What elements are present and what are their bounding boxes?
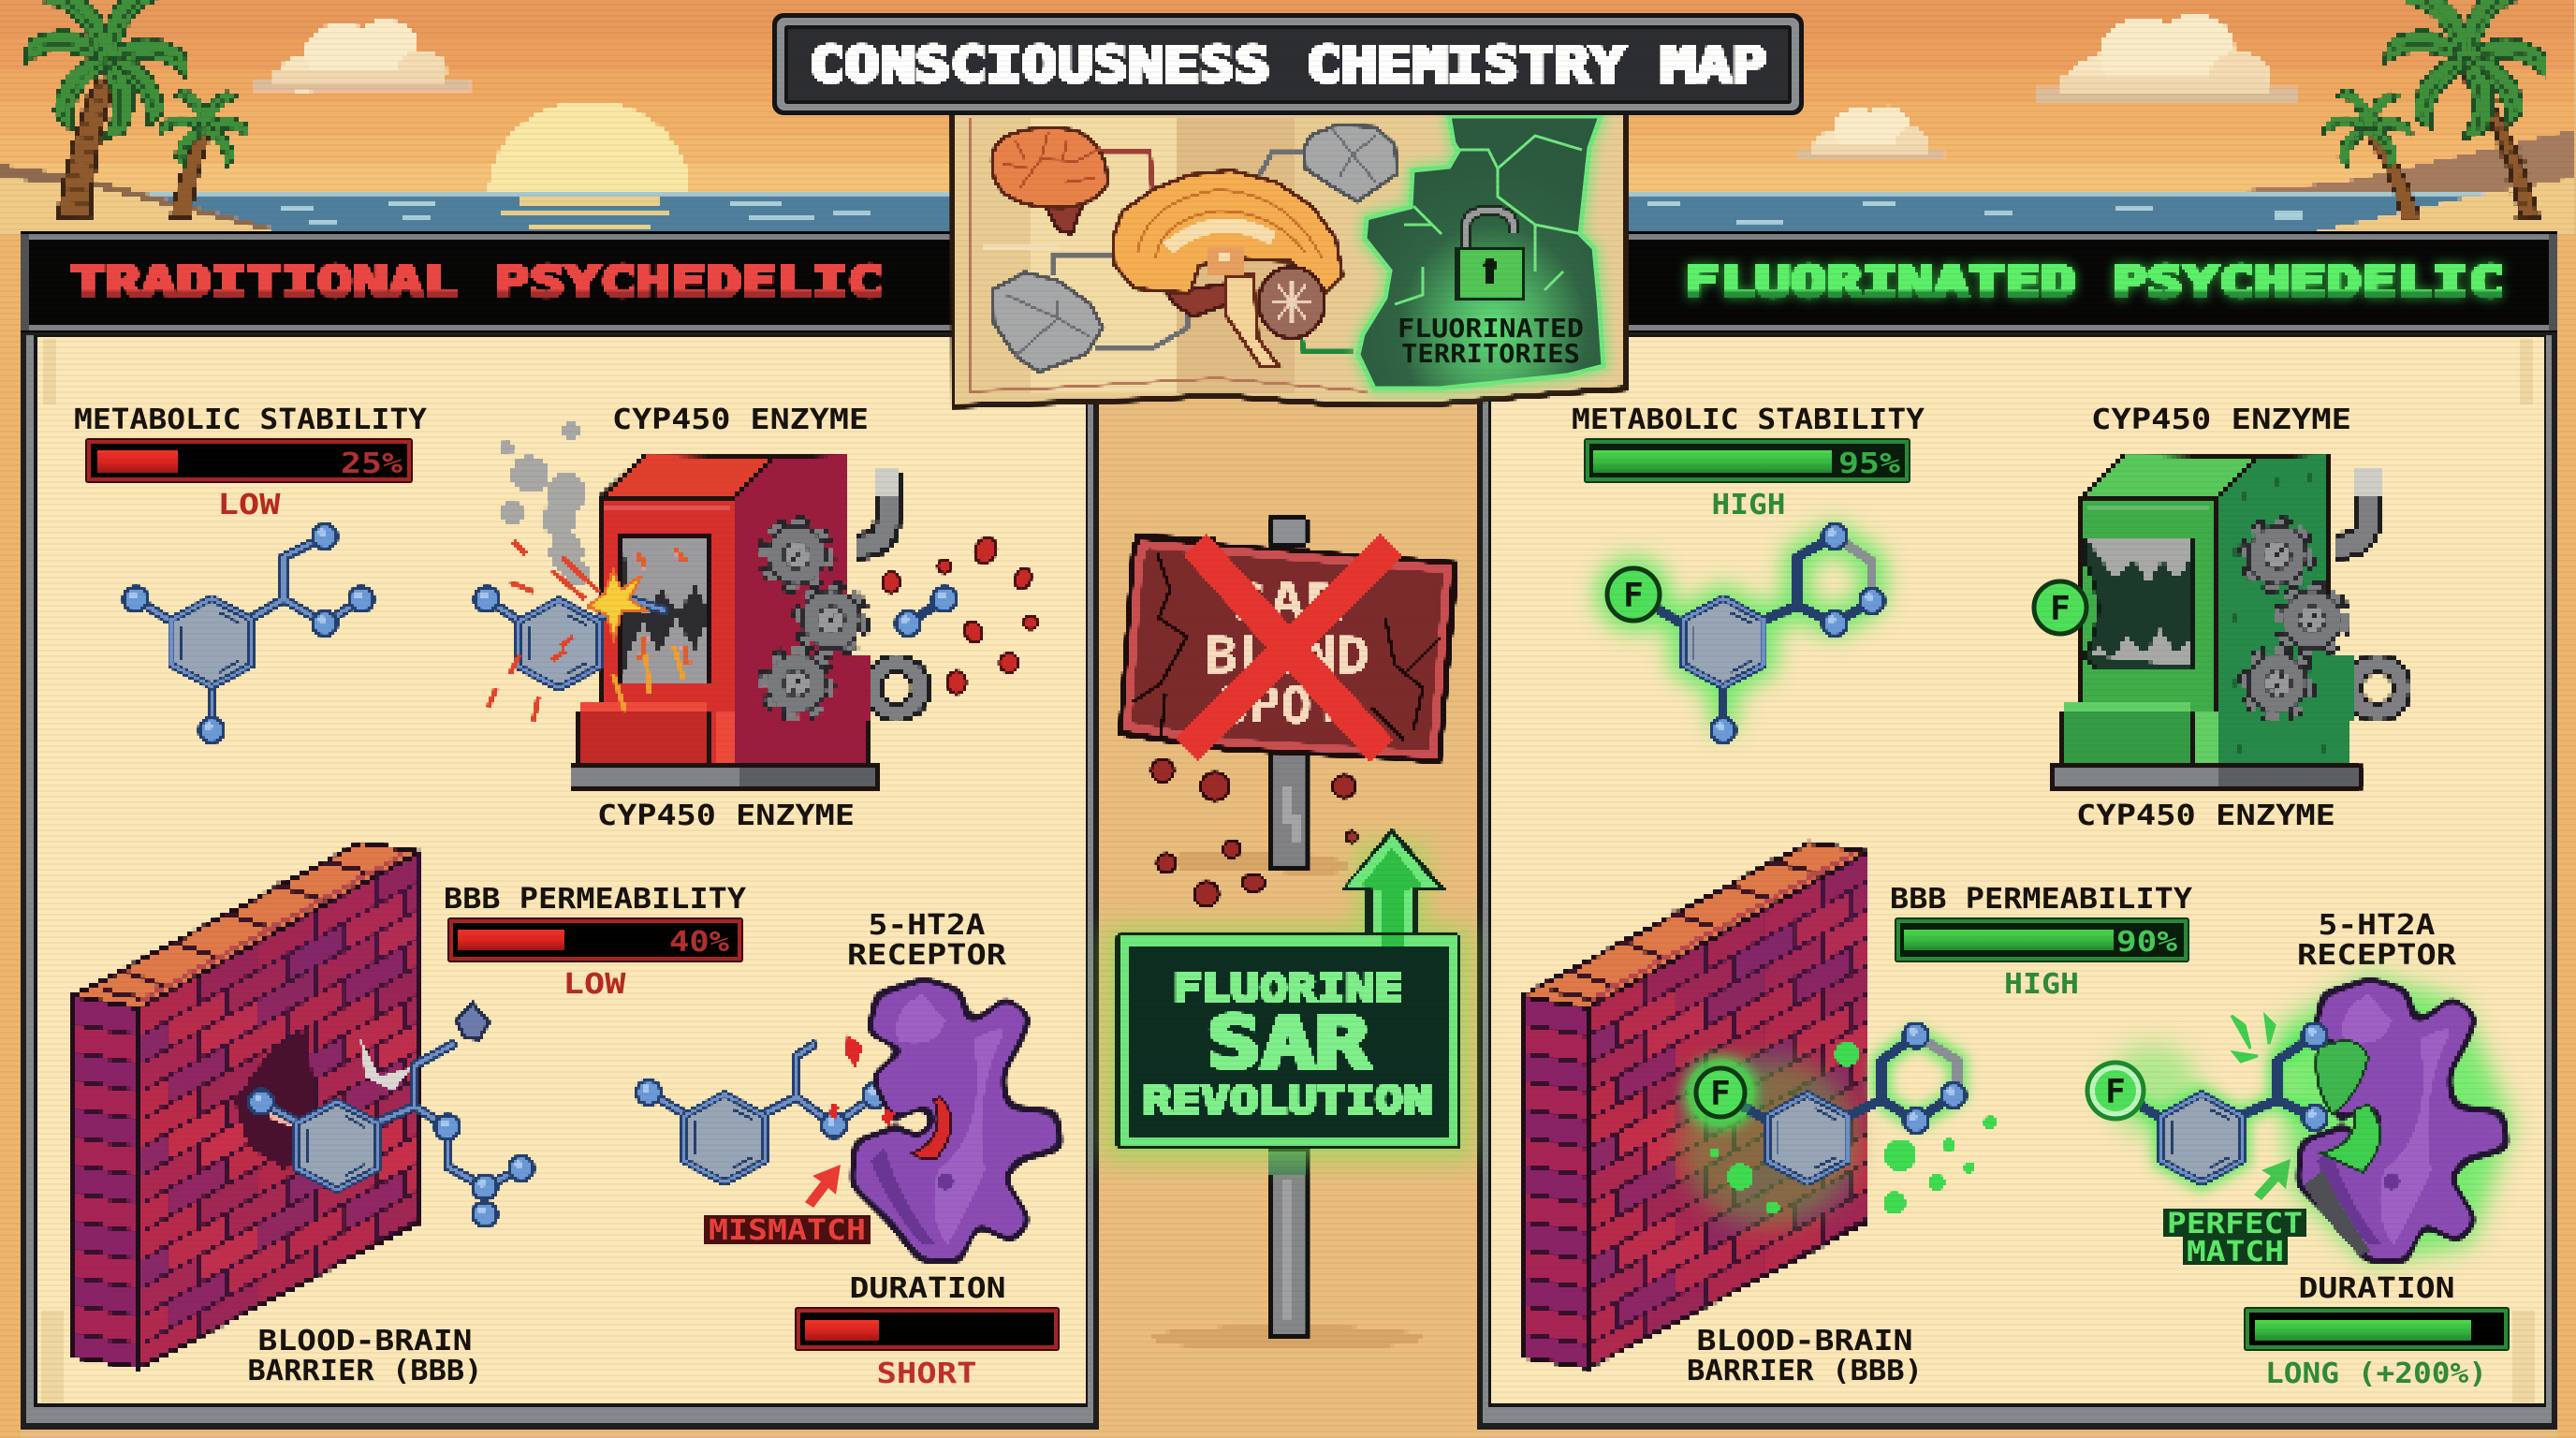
smoke cloud: [501, 422, 590, 586]
label: BBB permeability: BBB PERMEABILITY: [1890, 883, 2192, 916]
progress bar: BBB permeability 40%: [447, 917, 743, 962]
palm tree large left: [24, 0, 187, 217]
molecule crushed in machine: [475, 587, 665, 688]
icon: large brain cross-section: [1113, 170, 1342, 366]
sign board: [1116, 933, 1461, 1150]
label: CYP450 enzyme top: CYP450 ENZYME: [2091, 404, 2351, 436]
molecule glow: [2115, 1035, 2315, 1182]
arrow: perfect match: [2254, 1159, 2291, 1200]
label: duration: DURATION: [850, 1272, 1005, 1305]
label: fluorinated territories: FLUORINATED: [1398, 313, 1584, 344]
progress bar: BBB permeability 40%: 40%: [669, 926, 729, 959]
molecule glow: [1692, 1035, 1957, 1121]
machine: green CYP450 enzyme: [2052, 454, 2402, 787]
label: long plus 200 percent: LONG (+200%): [2265, 1357, 2487, 1390]
header bar right: [1620, 231, 2557, 332]
label: short: SHORT: [876, 1357, 977, 1390]
clouds: [253, 14, 2298, 159]
palm tree large right: [2384, 0, 2547, 217]
label: low permeability: LOW: [564, 968, 627, 1001]
label: CYP450 enzyme bottom: CYP450 ENZYME: [597, 800, 855, 832]
sea: [0, 191, 2576, 234]
sign text: fluorine: FLUORINE: [1173, 966, 1403, 1011]
red cross: [1187, 545, 1391, 751]
title text: CONSCIOUSNESS CHEMISTRY MAP: [809, 37, 1767, 94]
rubble drops: [1151, 759, 1357, 906]
sign text: SAR: SAR: [1207, 1001, 1369, 1084]
panel: traditional psychedelic: [21, 231, 1099, 1430]
molecule glow: [1609, 536, 1872, 730]
sign: fluorine SAR revolution: [1116, 828, 1461, 1150]
post lower: [1270, 1150, 1306, 1336]
mouth with crushing teeth: [621, 535, 710, 683]
green sparkles: [1710, 1042, 1997, 1214]
label: fluorinated territories: TERRITORIES: [1401, 338, 1580, 369]
label: high stability: HIGH: [1711, 489, 1786, 521]
label: metabolic stability: METABOLIC STABILITY: [74, 404, 427, 436]
molecule: perfect match: [2087, 1023, 2327, 1182]
caption: blood-brain barrier: BARRIER (BBB): [247, 1355, 483, 1387]
fluorine atom badge: [1607, 568, 1660, 621]
header bar left: [21, 231, 959, 332]
post upper: [1270, 516, 1306, 868]
fluorine atom badge: F: [1710, 1075, 1731, 1113]
label: CYP450 enzyme bottom: CYP450 ENZYME: [2076, 800, 2335, 832]
sign text: BLIND: [1205, 626, 1369, 685]
panel: fluorinated psychedelic: [1477, 231, 2557, 1430]
label: 5-HT2A: 5-HT2A: [2318, 909, 2436, 942]
fluorine atom entering enzyme: F: [2050, 590, 2071, 628]
green glow behind sign: [1105, 843, 1471, 1161]
progress bar: duration long: [2244, 1307, 2510, 1351]
panel frame right: [1477, 332, 2557, 1430]
progress bar: metabolic stability 95%: 95%: [1838, 448, 1900, 480]
upward arrow: [1340, 828, 1447, 946]
molecule: traditional: [124, 524, 373, 742]
panel frame left: [21, 332, 1099, 1430]
label: receptor: RECEPTOR: [847, 939, 1007, 972]
icon: gray territory left: [992, 272, 1103, 372]
sparks: [2232, 1016, 2275, 1062]
molecule stuck in wall: [249, 1004, 534, 1226]
fluorine atom badge: [2087, 1063, 2144, 1119]
sign: blind spot crossed out: [1118, 534, 1457, 765]
sign text: SPOT: [1217, 676, 1344, 735]
sign text: revolution: REVOLUTION: [1143, 1078, 1432, 1123]
receptor: purple with green fit: [2106, 974, 2513, 1264]
molecule: fluorinated: [1607, 524, 1884, 742]
caption: blood-brain barrier: [247, 1325, 483, 1387]
fluorine atom badge: [1687, 1059, 1754, 1126]
progress bar: metabolic stability 95%: [1584, 438, 1910, 483]
treasure map: consciousness territories: [950, 113, 1628, 409]
callout: perfect match: [2163, 1208, 2306, 1269]
brick wall: blood-brain barrier: [74, 843, 419, 1368]
fluorine atom entering enzyme: [2034, 581, 2086, 634]
label: receptor: RECEPTOR: [2297, 939, 2457, 972]
left beach: [0, 168, 271, 236]
icon: small orange brain: [992, 127, 1107, 234]
receptor: purple with red pocket: [829, 977, 1063, 1264]
label: fluorinated territories: [1398, 313, 1584, 369]
progress bar: duration short: [795, 1307, 1060, 1351]
right hill and beach: [2245, 129, 2576, 236]
caption: blood-brain barrier: BLOOD-BRAIN: [258, 1325, 472, 1357]
open maw with teeth: [2085, 539, 2191, 669]
caption: blood-brain barrier: BARRIER (BBB): [1687, 1355, 1923, 1387]
label: high permeability: HIGH: [2004, 968, 2079, 1001]
dirt patches: [1151, 850, 1423, 1350]
molecule: mismatch: [637, 1045, 887, 1182]
fluorine atom badge: F: [1623, 577, 1644, 615]
center column: signposts: [1105, 516, 1471, 1350]
progress bar: BBB permeability 90%: [1895, 917, 2189, 962]
hole in wall: [234, 1030, 316, 1170]
background: beach sunset scene: [0, 0, 2576, 236]
label: duration: DURATION: [2299, 1272, 2454, 1305]
palm tree small left: [160, 84, 249, 217]
label: low stability: LOW: [217, 489, 282, 521]
progress bar: metabolic stability 25%: [85, 438, 413, 483]
debris and broken fragment: [883, 535, 1037, 694]
label: CYP450 enzyme top: CYP450 ENZYME: [612, 404, 869, 436]
label: metabolic stability: METABOLIC STABILITY: [1572, 404, 1925, 436]
callout: perfect match: MATCH: [2187, 1236, 2284, 1269]
progress bar: BBB permeability 90%: 90%: [2116, 926, 2177, 959]
label: BBB permeability: BBB PERMEABILITY: [444, 883, 746, 916]
fluorine atom badge: F: [2105, 1073, 2126, 1111]
label: 5-HT2A receptor: 5-HT2A: [869, 909, 985, 942]
molecule passing through wall: [1687, 1023, 1997, 1214]
connector lines: [1054, 151, 1354, 352]
caption: blood-brain barrier: BLOOD-BRAIN: [1696, 1325, 1913, 1357]
callout: mismatch: MISMATCH: [709, 1214, 866, 1247]
title banner: [772, 13, 1804, 115]
sky: [0, 0, 2576, 194]
icon: gray territory top: [1304, 125, 1398, 201]
brick wall: blood-brain barrier passed: [1522, 843, 1867, 1368]
fluorinated territory: [1358, 116, 1603, 389]
caption: blood-brain barrier: [1687, 1325, 1923, 1387]
icon: open padlock: [1457, 211, 1524, 300]
machine: red CYP450 enzyme: [571, 454, 921, 787]
progress bar: metabolic stability 25%: 25%: [341, 448, 402, 480]
palm tree small right: [2323, 84, 2421, 219]
heading: fluorinated psychedelic: FLUORINATED PSYCHEDELIC: [1684, 257, 2504, 307]
explosion sparks: [489, 541, 683, 721]
sun: [489, 101, 690, 193]
heading: traditional psychedelic: TRADITIONAL PSYCHEDELIC: [70, 257, 883, 307]
arrow: mismatch: [805, 1165, 841, 1208]
parchment: [950, 113, 1628, 409]
receptor glow: [2106, 974, 2513, 1264]
callout: perfect match: PERFECT: [2167, 1208, 2303, 1240]
sign text: [1205, 573, 1369, 735]
sign text: SAR: [1231, 573, 1344, 632]
